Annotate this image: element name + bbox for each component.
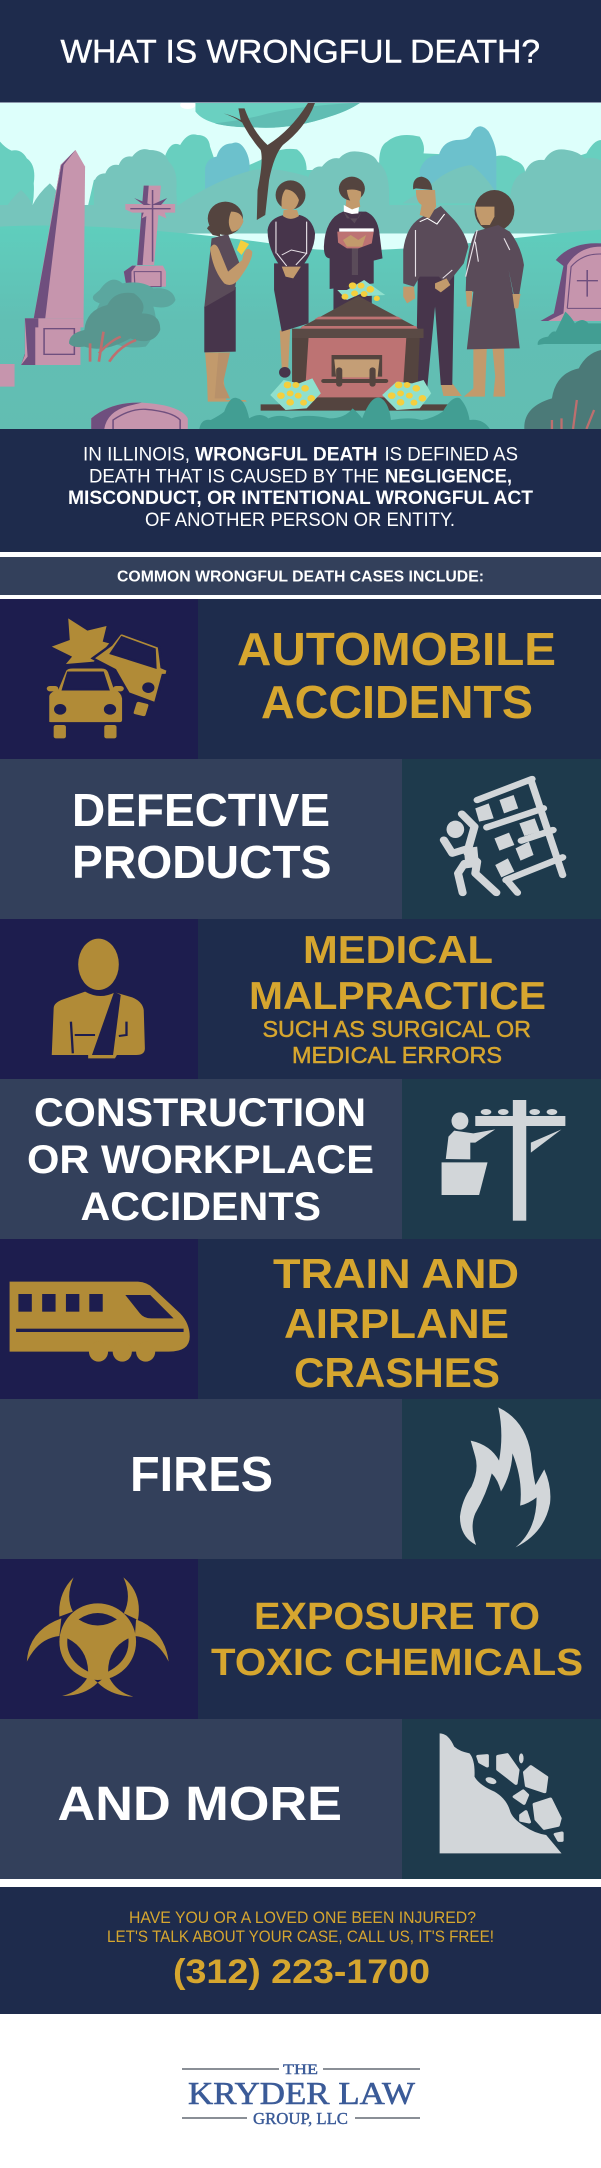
heading: CONSTRUCTION (34, 1091, 366, 1135)
heading: OR WORKPLACE (27, 1138, 374, 1182)
row: and more (0, 1719, 601, 1879)
small stone left (0, 364, 15, 387)
row: defective products (0, 759, 601, 919)
woman with flowers (204, 202, 252, 402)
heading: MEDICAL (303, 929, 493, 972)
row: medical malpractice (0, 919, 601, 1079)
icon: flame (460, 1407, 550, 1547)
subheading (262, 1016, 531, 1068)
heading: AUTOMOBILE (237, 623, 556, 675)
row: construction or workplace accidents (0, 1079, 601, 1239)
row: exposure to toxic chemicals (0, 1559, 601, 1719)
heading: PRODUCTS (72, 836, 332, 888)
icon: falling shelf (444, 779, 563, 893)
icon: biohazard (27, 1577, 169, 1697)
logo: The Kryder Law Group: THE (283, 2062, 318, 2078)
phone number: (312) 223-1700 (173, 1953, 430, 1991)
subheading: SUCH AS SURGICAL OR (262, 1016, 531, 1042)
heading: ACCIDENTS (80, 1185, 321, 1229)
person reading book (324, 177, 383, 310)
call to action text: HAVE YOU OR A LOVED ONE BEEN INJURED? (129, 1908, 476, 1927)
woman in dark dress (268, 180, 315, 378)
row: train and airplane crashes (0, 1239, 601, 1399)
tree (195, 103, 360, 220)
header banner (0, 0, 601, 103)
background bushes (0, 126, 601, 233)
title: WHAT IS WRONGFUL DEATH? (60, 34, 540, 70)
heading: AIRPLANE (284, 1300, 509, 1347)
panel: call to action (0, 1887, 601, 2014)
icon: utility pole worker (442, 1100, 565, 1221)
bush right (538, 312, 601, 345)
icon: rockslide (440, 1733, 562, 1853)
heading: TRAIN AND (273, 1250, 519, 1297)
heading (237, 623, 556, 728)
subheading text: COMMON WRONGFUL DEATH CASES INCLUDE: (117, 569, 484, 586)
heading: MALPRACTICE (249, 975, 546, 1018)
definition line 1 (83, 445, 518, 466)
definition line 3: MISCONDUCT, OR INTENTIONAL WRONGFUL ACT (68, 488, 533, 509)
subheading: MEDICAL ERRORS (292, 1042, 502, 1068)
bush bottom right (524, 350, 601, 429)
ground (0, 226, 601, 440)
foreground bushes (199, 397, 490, 429)
call to action text (107, 1908, 494, 1946)
icon: person with arm sling (52, 939, 145, 1058)
heading: DEFECTIVE (72, 784, 330, 836)
obelisk monument (21, 150, 85, 365)
heading (72, 784, 332, 888)
right gravestone (540, 243, 601, 321)
definition line 4: OF ANOTHER PERSON OR ENTITY. (145, 510, 455, 531)
rule above footer (0, 1879, 601, 1887)
subheading band (0, 557, 601, 595)
heading (211, 1596, 583, 1684)
logo: The Kryder Law Group: KRYDER LAW (188, 2075, 416, 2111)
icon: car crash (47, 618, 168, 738)
heading: EXPOSURE TO (254, 1596, 540, 1638)
cross gravestone (124, 186, 175, 287)
definition line 2: DEATH THAT IS CAUSED BY THE (89, 467, 379, 488)
shrub left (69, 280, 176, 362)
man in sweater (403, 177, 468, 396)
row: fires (0, 1399, 601, 1559)
heading (27, 1091, 374, 1229)
flower arrangements (270, 280, 431, 410)
heading: FIRES (130, 1448, 273, 1502)
heading: TOXIC CHEMICALS (211, 1642, 583, 1684)
heading: ACCIDENTS (261, 676, 533, 728)
panel: definition text (0, 429, 601, 552)
call to action text: LET'S TALK ABOUT YOUR CASE, CALL US, IT'S FREE! (107, 1927, 494, 1946)
logo: The Kryder Law Group: GROUP, LLC (253, 2109, 348, 2128)
row: automobile accidents (0, 599, 601, 759)
heading (249, 929, 546, 1018)
definition line 1: WRONGFUL DEATH (195, 445, 378, 466)
casket (261, 296, 448, 411)
heading: CRASHES (294, 1349, 500, 1396)
icon: train (10, 1282, 190, 1362)
woman in grey dress (464, 190, 524, 397)
definition line 2: NEGLIGENCE, (385, 467, 512, 488)
logo: The Kryder Law Group (182, 2062, 420, 2128)
bottom gravestone (91, 403, 188, 429)
heading: AND MORE (58, 1778, 342, 1831)
heading (273, 1250, 519, 1396)
definition line 1: IS DEFINED AS (384, 445, 518, 466)
definition line 1: IN ILLINOIS, (83, 445, 190, 466)
illustration: funeral in a cemetery (0, 101, 601, 440)
